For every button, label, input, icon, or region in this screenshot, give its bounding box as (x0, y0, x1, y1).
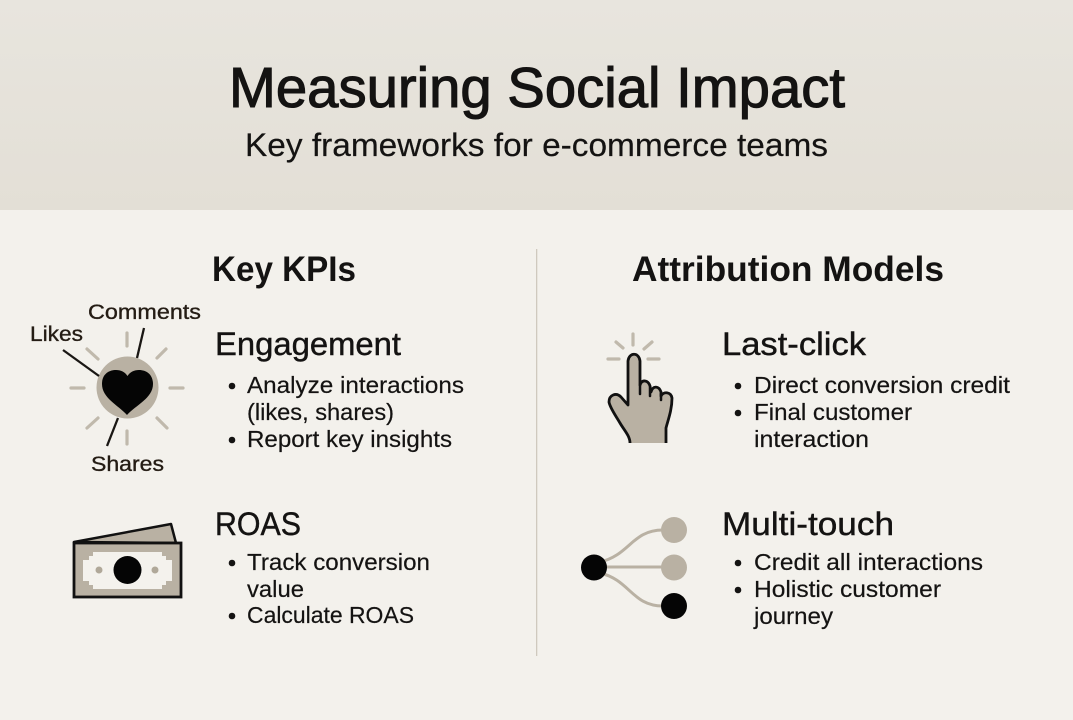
subtitle: Key frameworks for e-commerce teams (245, 127, 828, 163)
center divider (536, 249, 537, 656)
text block: Last-click: interaction (754, 426, 869, 452)
panel: Key KPIs (30, 250, 464, 628)
text block: Multi-touch: journey (753, 603, 833, 629)
label: Likes: Likes (30, 323, 83, 346)
icon: banknotes (74, 524, 181, 597)
text block: Last-click: Final customer (754, 399, 912, 425)
text block: ROAS: Calculate ROAS (247, 602, 414, 628)
text block: Engagement: Engagement (215, 326, 401, 362)
header band (0, 0, 1073, 210)
text block: Engagement: (likes, shares) (247, 399, 394, 425)
text block: Engagement (215, 326, 464, 452)
label: Comments: Comments (88, 301, 201, 324)
text block: ROAS (215, 506, 430, 628)
text block: ROAS: value (247, 576, 304, 602)
title: Measuring Social Impact (229, 56, 845, 120)
text block: Multi-touch: Holistic customer (754, 576, 941, 602)
text block: Engagement: Report key insights (247, 426, 452, 452)
text block: Engagement: Analyze interactions (247, 372, 464, 398)
heading: Key KPIs: Key KPIs (212, 250, 356, 289)
text block: Multi-touch: Multi-touch (722, 506, 894, 542)
text block: Last-click: Last-click (722, 326, 867, 362)
icon: multi-touch network (581, 517, 687, 619)
text block: ROAS: Track conversion (247, 549, 430, 575)
label: Shares: Shares (91, 453, 164, 476)
panel: Attribution Models (581, 250, 1010, 629)
heading: Attribution Models: Attribution Models (632, 250, 944, 289)
text block: ROAS: ROAS (215, 506, 301, 542)
text block: Last-click (722, 326, 1010, 452)
text block: Multi-touch: Credit all interactions (754, 549, 983, 575)
icon: clicking hand (608, 334, 672, 443)
icon: engagement heart with rays (63, 328, 183, 446)
text block: Multi-touch (722, 506, 983, 629)
text block: Last-click: Direct conversion credit (754, 372, 1010, 398)
